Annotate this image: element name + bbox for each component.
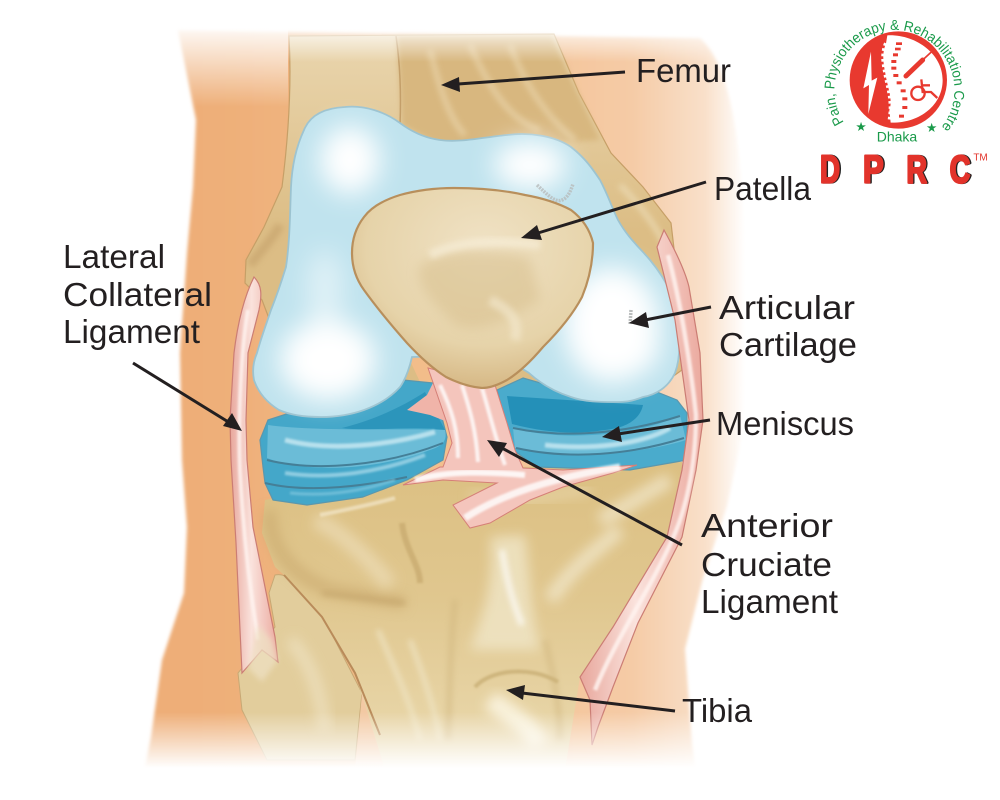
logo: DPRC wordmark: D — [820, 147, 840, 191]
fibula — [238, 575, 362, 760]
logo: Dhaka: Dhaka — [877, 128, 917, 144]
arrow: tibia — [506, 685, 675, 711]
femur shaft — [245, 34, 682, 400]
skin background — [145, 30, 746, 768]
logo: spine vertebra edge — [883, 43, 891, 122]
anterior cruciate ligament and tibial bands — [403, 368, 637, 528]
label: patella: Patella — [714, 170, 812, 207]
frayed lower attachment — [248, 625, 278, 682]
logo: DPRC wordmark: P — [864, 147, 885, 191]
meniscus: lateral — [260, 380, 447, 505]
label: femur: Femur — [636, 52, 731, 89]
label: lateral collateral ligament: Ligament — [63, 313, 200, 350]
label: anterior cruciate ligament: Ligament — [701, 583, 838, 620]
medial collateral ligament — [580, 230, 703, 745]
tibia shaft — [262, 462, 682, 770]
top fade of femur and medial skin — [288, 22, 760, 62]
bottom fade of skin and bones — [130, 712, 730, 787]
meniscus: medial — [497, 378, 687, 470]
arrow: femur — [441, 72, 625, 92]
label: lateral collateral ligament — [63, 238, 212, 350]
label: lateral collateral ligament: Lateral — [63, 238, 165, 275]
logo: lightning bolt — [863, 52, 877, 114]
lateral collateral ligament — [230, 277, 278, 682]
top fade of lateral skin — [165, 22, 288, 107]
peach gap behind the patella — [405, 350, 500, 385]
logo: red disc — [850, 31, 947, 129]
patella — [352, 188, 593, 388]
logo: DPRC wordmark: D — [821, 147, 841, 191]
arrow: articular cartilage — [629, 307, 711, 328]
fan fibres — [407, 383, 450, 423]
logo: DPRC wordmark: R — [906, 147, 927, 191]
logo: circular organisation name: Pain, Physiotherapy & Rehabilitation Centre — [824, 20, 964, 130]
logo: spine vertebra dashes — [891, 42, 907, 118]
label: tibia: Tibia — [682, 692, 753, 729]
logo: stars: ★ — [855, 119, 867, 134]
arrow: patella — [521, 182, 706, 240]
logo: syringe — [906, 53, 931, 76]
label: articular cartilage: Articular — [719, 289, 855, 326]
label: anterior cruciate ligament — [701, 507, 838, 620]
label: articular cartilage — [719, 289, 857, 363]
logo: stars — [855, 119, 937, 135]
logo: trademark: TM — [973, 153, 988, 164]
tibia and fibula — [238, 462, 682, 770]
label: meniscus: Meniscus — [716, 405, 854, 442]
label: articular cartilage: Cartilage — [719, 326, 857, 363]
logo: spine white area — [883, 35, 943, 123]
arrow: anterior cruciate ligament — [487, 440, 682, 545]
label: anterior cruciate ligament: Cruciate — [701, 546, 832, 583]
arrow: lateral collateral ligament — [133, 363, 242, 431]
label: anterior cruciate ligament: Anterior — [701, 507, 833, 544]
logo: DPRC wordmark: C — [950, 147, 970, 191]
arrow: meniscus — [602, 420, 710, 442]
logo: DPRC wordmark: C — [951, 147, 972, 191]
cartilage speckle marks — [537, 184, 573, 201]
logo: stars: ★ — [926, 120, 937, 135]
logo: wheelchair — [911, 79, 937, 100]
logo: DPRC wordmark: P — [863, 147, 884, 191]
logo: DPRC — [820, 20, 988, 191]
gap between fibula and tibia — [355, 693, 385, 770]
articular cartilage on femoral condyles — [253, 107, 679, 417]
logo: DPRC wordmark: R — [908, 147, 928, 191]
logo: DPRC wordmark — [820, 147, 972, 191]
label: lateral collateral ligament: Collateral — [63, 276, 212, 313]
